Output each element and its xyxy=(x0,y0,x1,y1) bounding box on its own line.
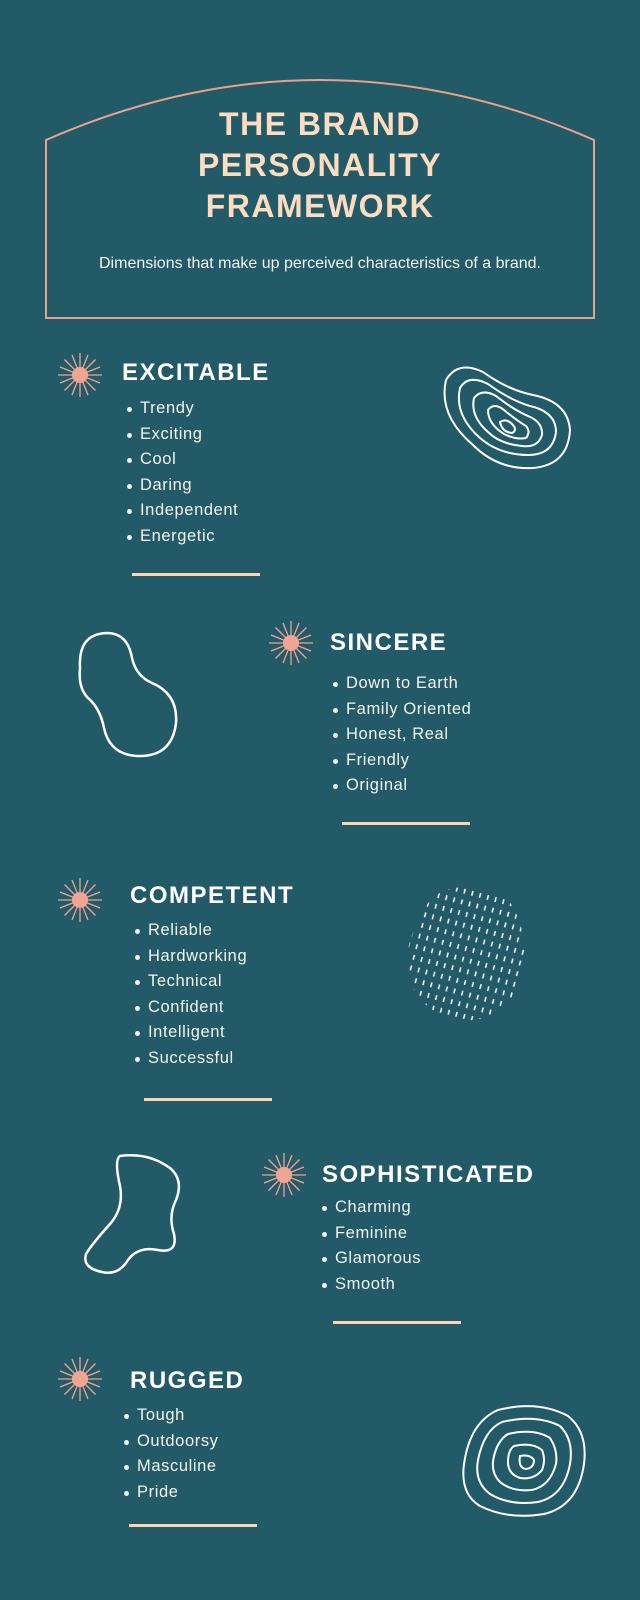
subtitle: Dimensions that make up perceived characteristics of a brand. xyxy=(99,255,541,272)
list: Hardworking xyxy=(148,947,247,965)
list: Technical xyxy=(148,972,222,990)
list: Honest, Real xyxy=(346,725,449,743)
list: Confident xyxy=(148,998,224,1016)
title: PERSONALITY xyxy=(198,147,442,183)
heading: RUGGED xyxy=(130,1367,244,1394)
list: Smooth xyxy=(335,1275,395,1293)
list: Reliable xyxy=(148,921,212,939)
list: Pride xyxy=(137,1483,179,1501)
heading: COMPETENT xyxy=(130,882,294,909)
list: Trendy xyxy=(140,399,194,417)
title xyxy=(198,106,442,224)
heading: EXCITABLE xyxy=(122,359,270,386)
list xyxy=(124,1406,219,1501)
section: rugged xyxy=(58,1357,244,1501)
list: Down to Earth xyxy=(346,674,458,692)
title: THE BRAND xyxy=(219,106,421,142)
divider xyxy=(132,573,260,576)
frame: title arch box xyxy=(45,79,595,319)
shape: dashed texture blob xyxy=(408,888,524,1020)
list: Feminine xyxy=(335,1224,408,1242)
list: Successful xyxy=(148,1049,234,1067)
list: Glamorous xyxy=(335,1249,421,1267)
section: excitable xyxy=(58,353,270,545)
list xyxy=(322,1198,421,1293)
divider xyxy=(144,1098,272,1101)
list xyxy=(135,921,247,1067)
list: Intelligent xyxy=(148,1023,225,1041)
title: FRAMEWORK xyxy=(206,188,434,224)
list: Independent xyxy=(140,501,238,519)
icon: starburst xyxy=(58,878,102,922)
heading: SINCERE xyxy=(330,629,447,656)
divider xyxy=(129,1524,257,1527)
list: Tough xyxy=(137,1406,185,1424)
icon: starburst xyxy=(269,621,313,665)
list: Daring xyxy=(140,476,192,494)
list: Energetic xyxy=(140,527,215,545)
divider xyxy=(333,1321,461,1324)
shape: contour blob 2 xyxy=(462,1405,586,1517)
shape: blob outline 2 xyxy=(84,1154,180,1274)
list: Friendly xyxy=(346,751,410,769)
icon: starburst xyxy=(262,1153,306,1197)
shape: blob outline 1 xyxy=(78,632,178,758)
list: Charming xyxy=(335,1198,411,1216)
icon: starburst xyxy=(58,1357,102,1401)
shape: contour blob 1 xyxy=(444,366,571,470)
list: Cool xyxy=(140,450,176,468)
list: Outdoorsy xyxy=(137,1432,219,1450)
list xyxy=(333,674,471,794)
list: Family Oriented xyxy=(346,700,471,718)
divider xyxy=(342,822,470,825)
section: competent xyxy=(58,878,294,1067)
list: Original xyxy=(346,776,408,794)
section: sophisticated xyxy=(262,1153,534,1293)
list xyxy=(127,399,238,545)
list: Exciting xyxy=(140,425,203,443)
section: sincere xyxy=(269,621,471,794)
heading: SOPHISTICATED xyxy=(322,1161,534,1188)
icon: starburst xyxy=(58,353,102,397)
list: Masculine xyxy=(137,1457,217,1475)
